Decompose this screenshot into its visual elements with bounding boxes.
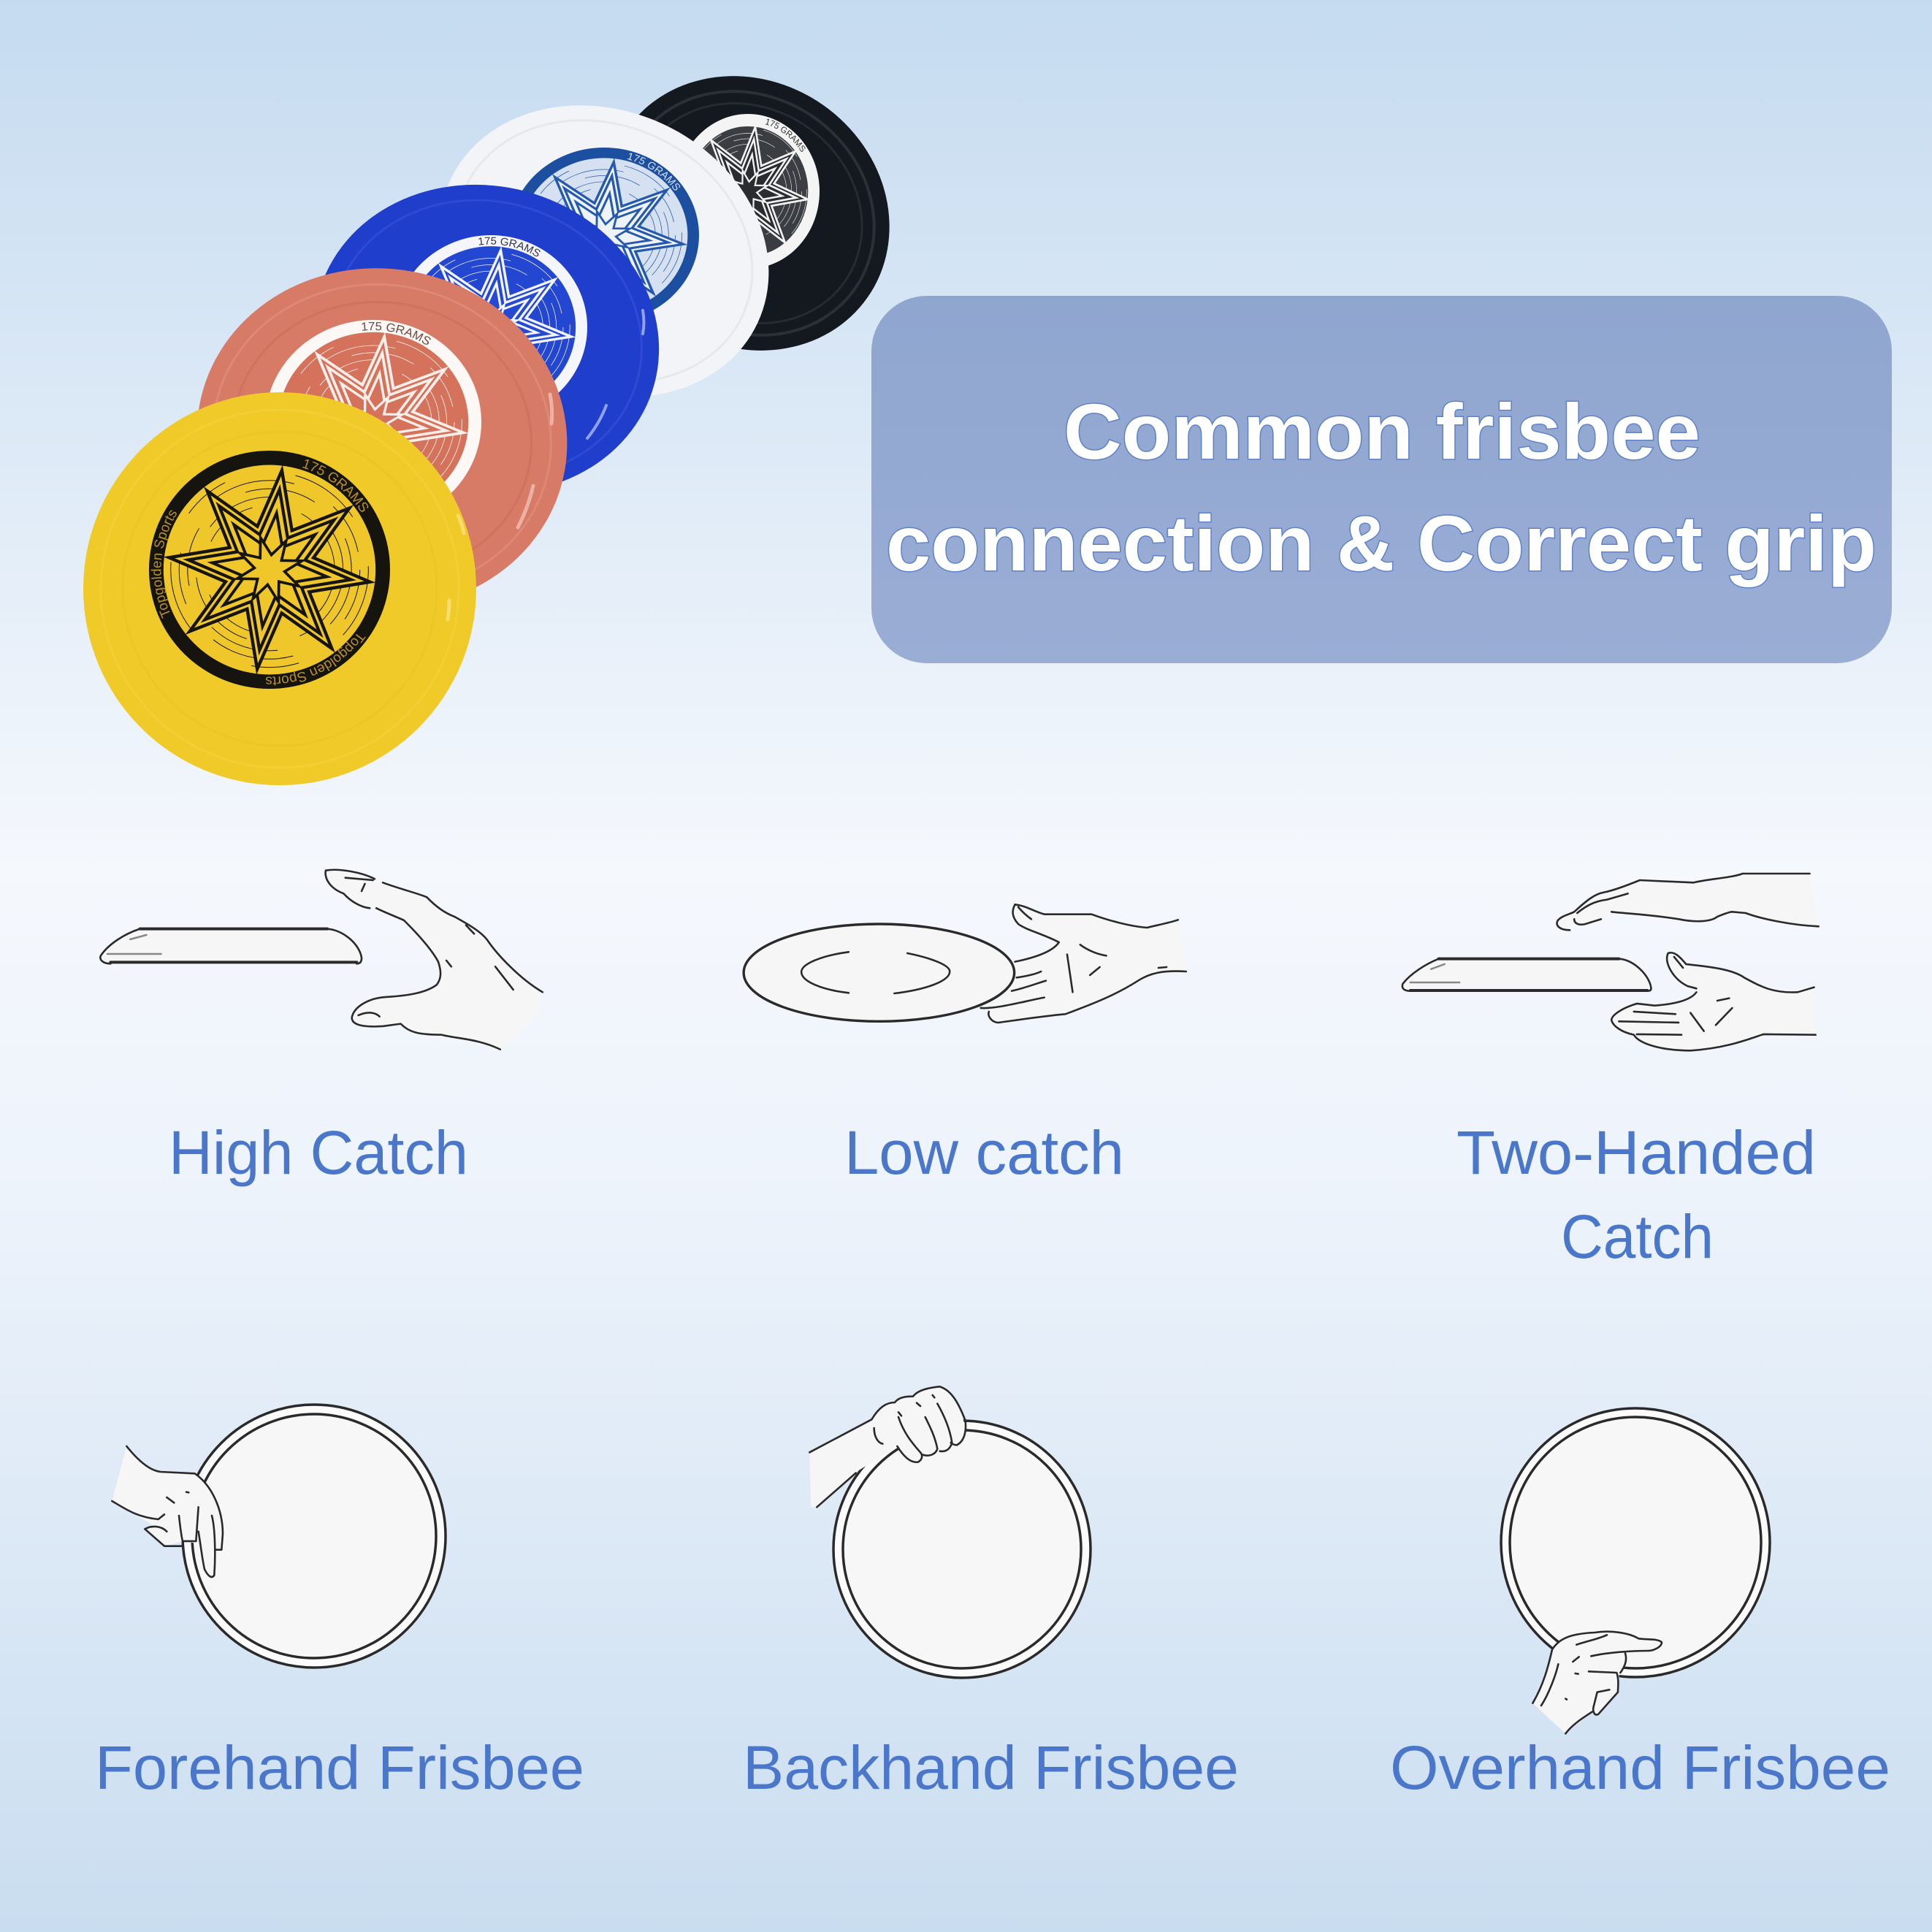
frisbee top view <box>744 924 1015 1021</box>
hand <box>112 1446 223 1577</box>
title panel <box>871 296 1892 663</box>
illustration: backhand grip <box>809 1386 1091 1678</box>
frisbee side view <box>1402 959 1651 991</box>
frisbee: yellow: Topgolden Sports <box>266 634 366 686</box>
frisbee side view <box>100 929 362 963</box>
frisbee: blue <box>325 184 659 482</box>
frisbee: salmon <box>199 268 567 587</box>
frisbee: blue: 175 GRAMS <box>478 237 541 257</box>
frisbee stack <box>83 76 892 785</box>
label: two-handed catch <box>1456 1118 1816 1271</box>
frisbee: white: 175 GRAMS <box>627 153 681 191</box>
title: connection & Correct grip <box>886 499 1876 587</box>
frisbee: yellow: Topgolden Sports <box>150 510 177 619</box>
label: two-handed catch: Catch <box>1561 1202 1714 1271</box>
label: forehand frisbee: Forehand Frisbee <box>95 1733 584 1802</box>
upper hand <box>1557 874 1819 930</box>
frisbee: salmon: 175 GRAMS <box>362 321 431 345</box>
title: Common frisbee <box>1064 387 1700 476</box>
illustration: high catch <box>100 870 543 1050</box>
hand <box>981 904 1186 1023</box>
label: backhand frisbee: Backhand Frisbee <box>743 1733 1239 1802</box>
label: overhand frisbee: Overhand Frisbee <box>1390 1733 1890 1802</box>
lower hand <box>1611 952 1816 1050</box>
title <box>886 387 1876 587</box>
frisbee: white <box>447 105 768 396</box>
hand <box>809 1386 966 1507</box>
label: two-handed catch: Two-Handed <box>1456 1118 1816 1187</box>
frisbee top view <box>1501 1408 1770 1677</box>
frisbee: black: 175 GRAMS <box>765 118 806 152</box>
frisbee: black <box>638 76 890 351</box>
frisbee: yellow <box>83 392 476 785</box>
frisbee: yellow: 175 GRAMS <box>302 459 368 512</box>
illustration: overhand grip <box>1501 1408 1770 1733</box>
label: high catch: High Catch <box>169 1118 468 1187</box>
hand <box>326 870 543 1050</box>
frisbee top view <box>833 1421 1091 1678</box>
hand <box>1532 1631 1662 1733</box>
illustration: low catch <box>744 904 1186 1023</box>
frisbee top view <box>183 1405 446 1668</box>
label: low catch: Low catch <box>844 1118 1124 1187</box>
illustration: two-handed catch <box>1402 874 1819 1050</box>
illustration: forehand grip <box>112 1405 446 1668</box>
